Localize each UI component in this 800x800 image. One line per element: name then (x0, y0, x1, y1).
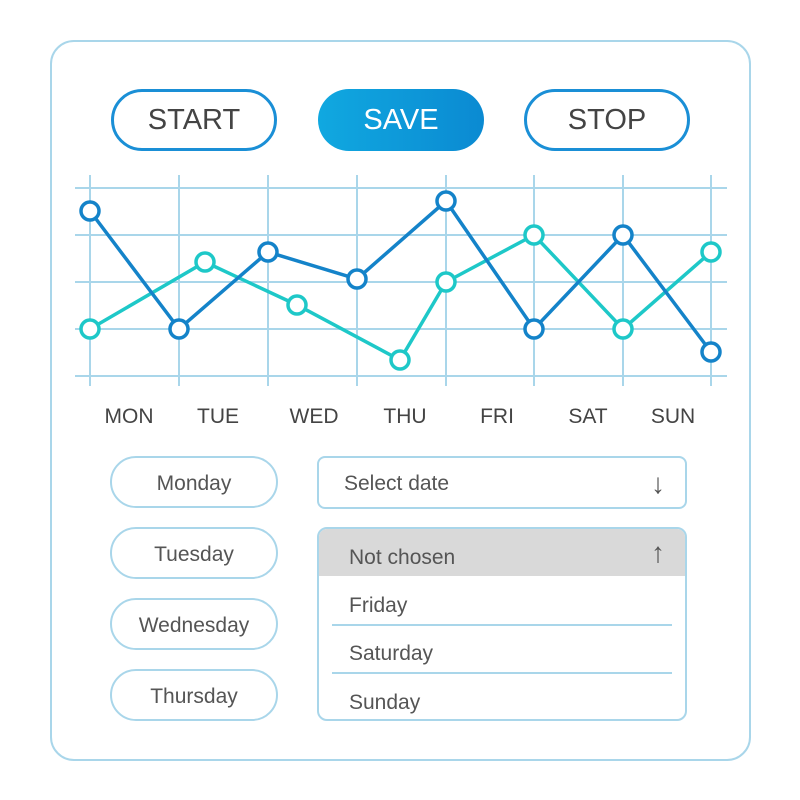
pill: thursday: Thursday (150, 684, 238, 708)
list item: sunday: Sunday (349, 691, 420, 714)
dropdown: open list (317, 527, 687, 721)
pill: monday (110, 456, 278, 508)
axis labels: WED (290, 405, 338, 428)
list header: ↑ (651, 536, 665, 568)
dropdown: select date: Select date (344, 472, 449, 495)
list item: friday: Friday (349, 594, 407, 617)
panel: card frame (50, 40, 751, 761)
list item: friday (332, 578, 672, 626)
pill: monday: Monday (157, 472, 231, 494)
axis labels: SUN (651, 405, 695, 428)
list header (319, 529, 685, 576)
line chart (75, 175, 727, 428)
axis labels: SAT (568, 405, 608, 428)
pill: tuesday: Tuesday (154, 542, 234, 566)
dropdown: select date: ↓ (651, 468, 665, 499)
series: blue (81, 192, 720, 361)
button: start (111, 89, 277, 151)
list item: saturday (332, 626, 672, 674)
pill: wednesday (110, 598, 278, 650)
list item: saturday: Saturday (349, 642, 433, 665)
list header: Not chosen (349, 546, 455, 568)
axis labels: TUE (197, 405, 239, 428)
dropdown: select date (317, 456, 687, 509)
axis labels: MON (104, 405, 154, 428)
axis labels (104, 405, 695, 428)
button: save (318, 89, 484, 151)
button: save: SAVE (363, 104, 439, 136)
axis labels: FRI (480, 405, 514, 428)
series: teal (81, 226, 720, 369)
axis labels: THU (383, 405, 427, 428)
pill: wednesday: Wednesday (139, 614, 249, 636)
button: stop (524, 89, 690, 151)
button: start: START (148, 104, 240, 136)
pill: thursday (110, 669, 278, 721)
pill: tuesday (110, 527, 278, 579)
button: stop: STOP (568, 104, 646, 136)
